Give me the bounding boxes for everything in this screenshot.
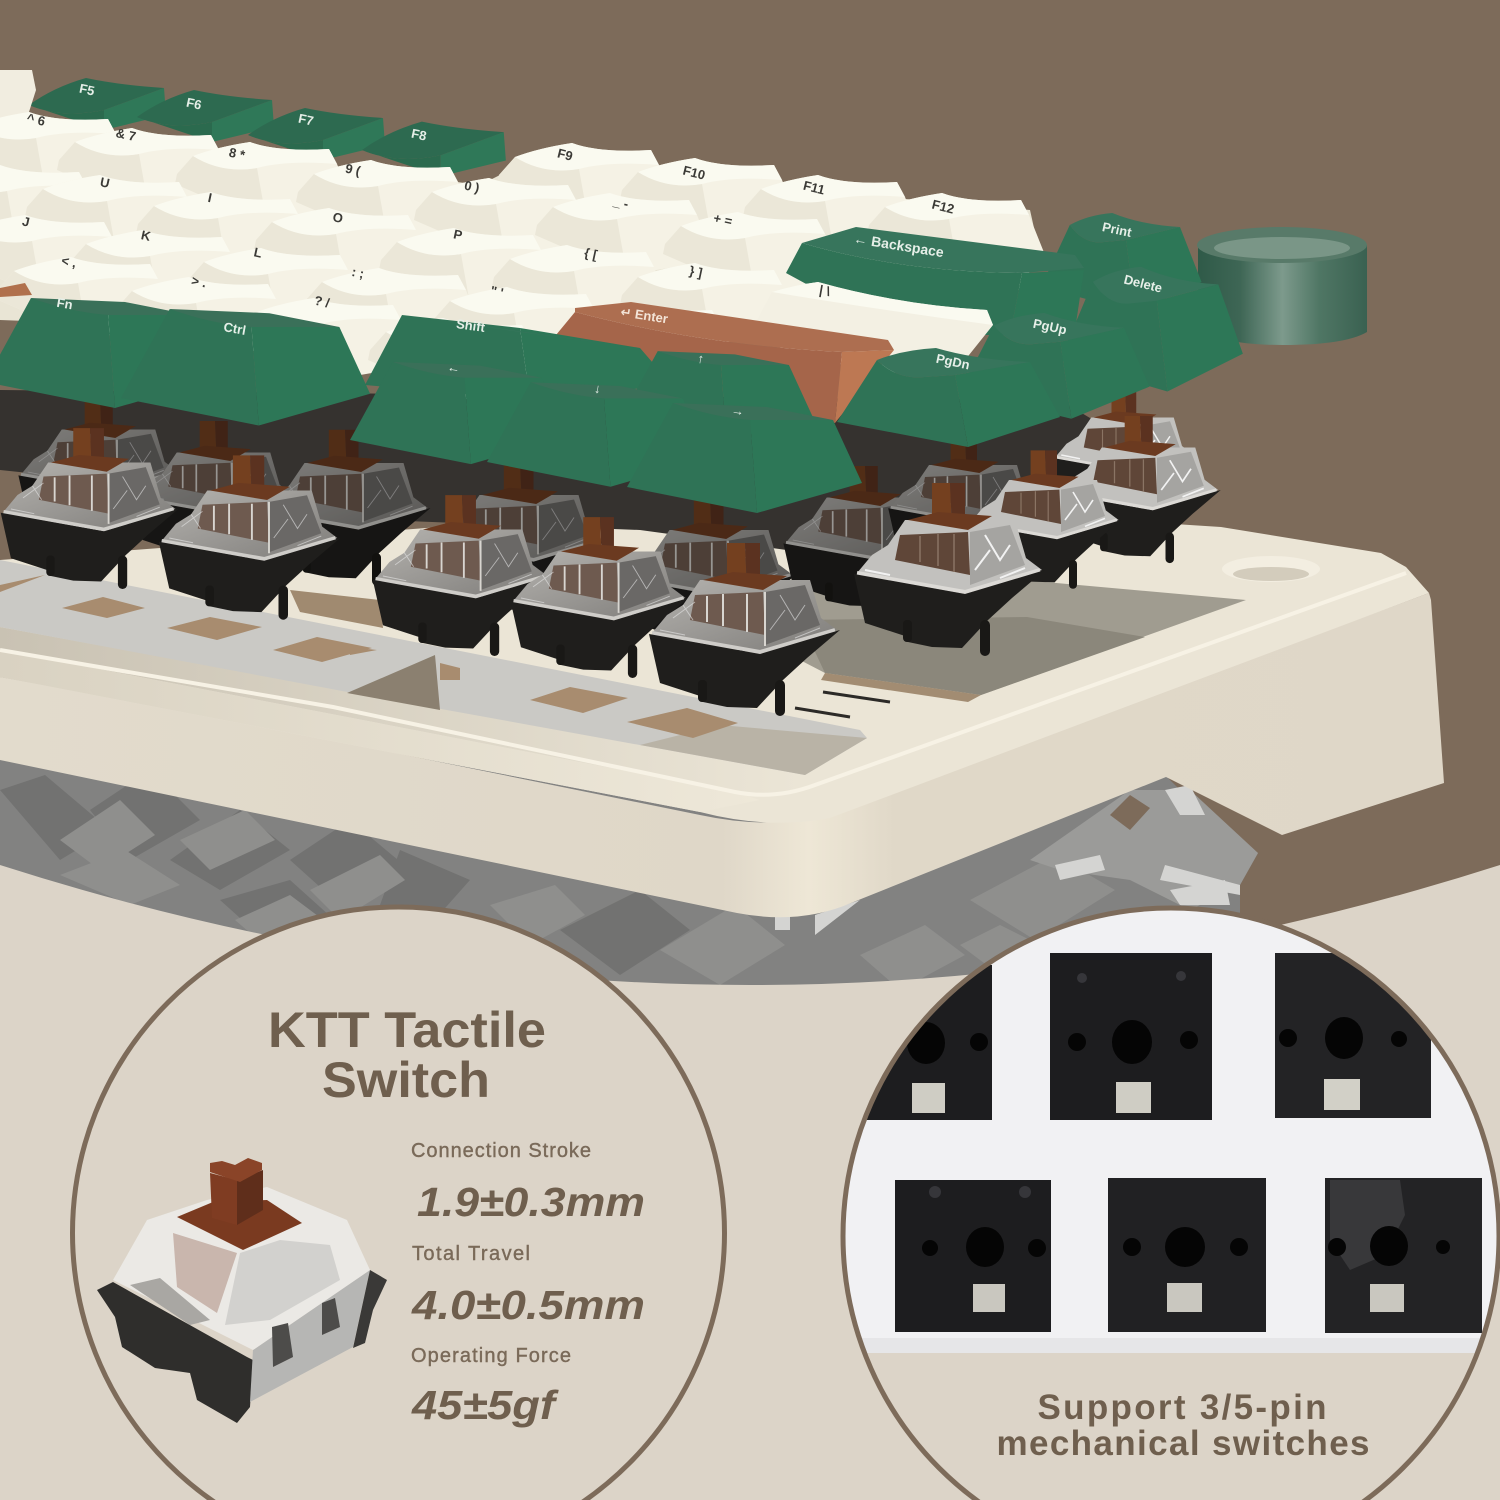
key: page down bbox=[837, 348, 1060, 447]
title: KTT Tactile Switch: Switch bbox=[322, 1052, 490, 1108]
spec: total travel: 4.0±0.5mm bbox=[411, 1282, 645, 1328]
cream key legends: J bbox=[21, 214, 31, 230]
wide cream key: | \ bbox=[818, 282, 832, 299]
keyboard case bbox=[0, 500, 1444, 917]
cream key legends: L bbox=[252, 244, 263, 261]
socket top right bbox=[1275, 953, 1431, 1118]
spec: connection stroke: Connection Stroke bbox=[411, 1140, 591, 1162]
spec: operating force: Operating Force bbox=[411, 1345, 571, 1367]
key: orange enter: ↵ Enter bbox=[620, 304, 669, 326]
cream key legends: " ' bbox=[489, 283, 505, 300]
dark shadow under keycaps bbox=[0, 390, 1110, 560]
PCB photo bbox=[840, 905, 1500, 1353]
socket bottom right bbox=[1325, 1178, 1482, 1333]
spec: total travel: Total Travel bbox=[412, 1243, 530, 1265]
wide green key: Shift bbox=[455, 316, 487, 335]
key: arrow back: ↑ bbox=[696, 351, 705, 367]
caption: support 3/5-pin: mechanical switches bbox=[996, 1424, 1370, 1463]
cream key legends: 8 * bbox=[228, 145, 247, 163]
cream key legends: > . bbox=[190, 273, 208, 290]
cream key legends: F10 bbox=[681, 163, 707, 183]
function row green keys: F6 bbox=[185, 95, 203, 113]
key: delete bbox=[1060, 267, 1243, 392]
back row switches bbox=[18, 398, 1041, 652]
spec: connection stroke bbox=[411, 1140, 645, 1225]
left green keys: Ctrl bbox=[222, 319, 247, 338]
cream keycaps bbox=[0, 112, 1047, 400]
socket bottom left bbox=[895, 1180, 1051, 1332]
square cutouts bbox=[0, 575, 738, 738]
volume knob bbox=[1197, 227, 1367, 345]
cream keycap base bbox=[0, 130, 1040, 340]
spec: operating force bbox=[411, 1345, 571, 1428]
title: KTT Tactile Switch: KTT Tactile bbox=[268, 1002, 546, 1058]
spec: connection stroke: 1.9±0.3mm bbox=[417, 1179, 645, 1225]
spec: total travel bbox=[411, 1243, 645, 1328]
key: page up: PgUp bbox=[1032, 316, 1068, 337]
cream key legends: O bbox=[331, 209, 344, 226]
wide cream key bbox=[757, 282, 993, 375]
well right bbox=[800, 560, 1246, 695]
key: delete: Delete bbox=[1122, 272, 1164, 296]
wide green key bbox=[365, 315, 672, 400]
cream key legends: 0 ) bbox=[463, 178, 481, 196]
caption: support 3/5-pin bbox=[996, 1388, 1370, 1463]
key: backspace bbox=[786, 227, 1084, 335]
key: orange enter bbox=[556, 302, 894, 423]
knob hole bbox=[1222, 556, 1320, 582]
key: print: Print bbox=[1101, 219, 1134, 240]
caption: support 3/5-pin: Support 3/5-pin bbox=[1038, 1388, 1326, 1427]
cream key legends: { [ bbox=[583, 245, 600, 262]
cream key legends: < , bbox=[60, 253, 78, 270]
case front face bbox=[0, 593, 1444, 917]
key: page down: PgDn bbox=[935, 351, 971, 372]
circle panel: PCB hot-swap sockets bbox=[840, 905, 1500, 1500]
function row green keys: F7 bbox=[297, 111, 315, 129]
plate well left bbox=[0, 560, 867, 775]
socket bottom middle bbox=[1108, 1178, 1266, 1332]
cream key legends: F12 bbox=[930, 197, 956, 217]
key: arrow back bbox=[620, 351, 813, 441]
cream key legends: ^ 6 bbox=[25, 110, 47, 129]
left green keys: Fn bbox=[56, 295, 74, 312]
cream key legends: & 7 bbox=[114, 125, 137, 144]
function row green keys: F8 bbox=[410, 126, 428, 144]
cream key legends: + = bbox=[712, 210, 734, 229]
cream key legends: F11 bbox=[802, 178, 826, 198]
socket top left bbox=[860, 965, 992, 1120]
cream key legends: P bbox=[452, 226, 464, 243]
cream key legends: K bbox=[140, 227, 153, 244]
spec: operating force: 45±5gf bbox=[411, 1382, 560, 1428]
front row switches bbox=[1, 390, 1221, 716]
case top surface bbox=[0, 500, 1429, 823]
front green keys: ← bbox=[446, 359, 461, 376]
cream key legends: : ; bbox=[350, 264, 366, 281]
cream key legends: } ] bbox=[688, 263, 704, 280]
key: backspace: ← Backspace bbox=[853, 230, 945, 260]
cream key legends bbox=[21, 110, 956, 311]
transparent lower plate bbox=[0, 750, 1258, 1020]
cream key legends: ? / bbox=[313, 293, 331, 311]
cream key legends: F9 bbox=[556, 146, 574, 164]
function row green keys bbox=[29, 78, 506, 176]
cream key legends: U bbox=[99, 174, 111, 191]
key: page up bbox=[960, 313, 1150, 419]
cream key legends: _ - bbox=[611, 193, 630, 212]
cream key legends: I bbox=[207, 190, 213, 205]
function row green keys: F5 bbox=[78, 81, 96, 99]
left green keys bbox=[0, 295, 370, 426]
orange corner key bbox=[0, 283, 32, 297]
front green keys: → bbox=[730, 402, 745, 419]
circle panel: KTT tactile switch bbox=[72, 907, 724, 1500]
key: print bbox=[1041, 213, 1202, 312]
background: beige lower area bbox=[0, 865, 1500, 1500]
icon: brown switch illustration bbox=[97, 1158, 387, 1423]
front green keys bbox=[350, 359, 862, 513]
cream key legends: 9 ( bbox=[344, 161, 363, 179]
title: KTT Tactile Switch bbox=[268, 1002, 546, 1108]
top left cream key bbox=[0, 70, 36, 122]
front green keys: ↓ bbox=[593, 381, 602, 397]
socket top middle bbox=[1050, 953, 1212, 1120]
